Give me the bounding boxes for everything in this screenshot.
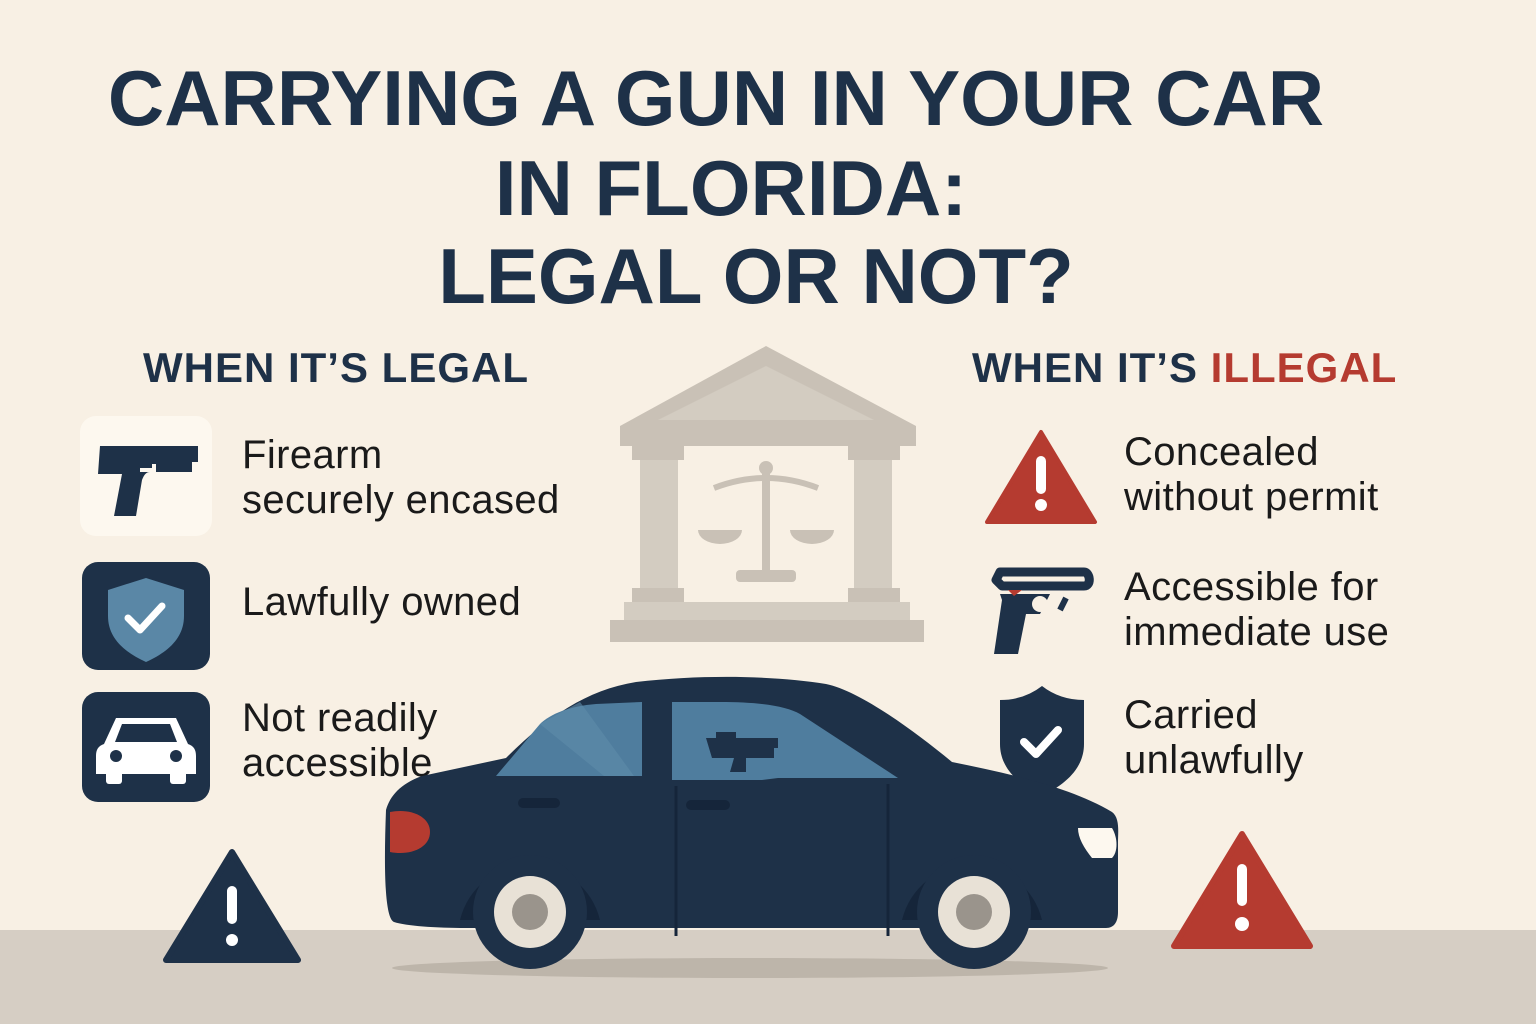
title: LEGAL OR NOT? xyxy=(438,232,1074,320)
icon: gun box xyxy=(80,416,212,536)
text: legal 3 xyxy=(242,696,438,785)
car xyxy=(385,677,1118,969)
text: illegal 1: Concealed xyxy=(1124,430,1319,474)
text: illegal 2: immediate use xyxy=(1124,610,1389,654)
text: legal 1 xyxy=(242,433,560,522)
text: illegal 3: unlawfully xyxy=(1124,738,1304,782)
text: legal 1: securely encased xyxy=(242,478,560,522)
icon: courthouse xyxy=(610,346,924,642)
icon: car box xyxy=(82,692,210,802)
text: illegal 3 xyxy=(1124,693,1304,782)
title: CARRYING A GUN IN YOUR CAR xyxy=(108,54,1324,142)
heading: legal: WHEN IT’S LEGAL xyxy=(143,344,529,391)
heading: illegal: WHEN IT’S ILLEGAL xyxy=(972,344,1397,391)
icon: shield illegal xyxy=(1000,686,1084,796)
title: IN FLORIDA: xyxy=(495,144,967,232)
text: illegal 1: without permit xyxy=(1124,475,1379,519)
text: legal 2: Lawfully owned xyxy=(242,580,521,624)
icon: red warning 1 xyxy=(987,432,1095,522)
icon: red warning 2 xyxy=(1174,834,1310,946)
text: legal 1: Firearm xyxy=(242,433,383,477)
ground xyxy=(0,930,1536,1024)
icon: shield box xyxy=(82,562,210,670)
title xyxy=(108,54,1324,320)
text: legal 3: accessible xyxy=(242,741,433,785)
text: illegal 2: Accessible for xyxy=(1124,565,1379,609)
icon: gun illegal xyxy=(994,572,1089,654)
car shadow xyxy=(392,958,1108,978)
text: illegal 2 xyxy=(1124,565,1389,654)
text: illegal 1 xyxy=(1124,430,1379,519)
text: illegal 3: Carried xyxy=(1124,693,1258,737)
text: legal 3: Not readily xyxy=(242,696,438,740)
icon: dark warning xyxy=(166,852,298,960)
